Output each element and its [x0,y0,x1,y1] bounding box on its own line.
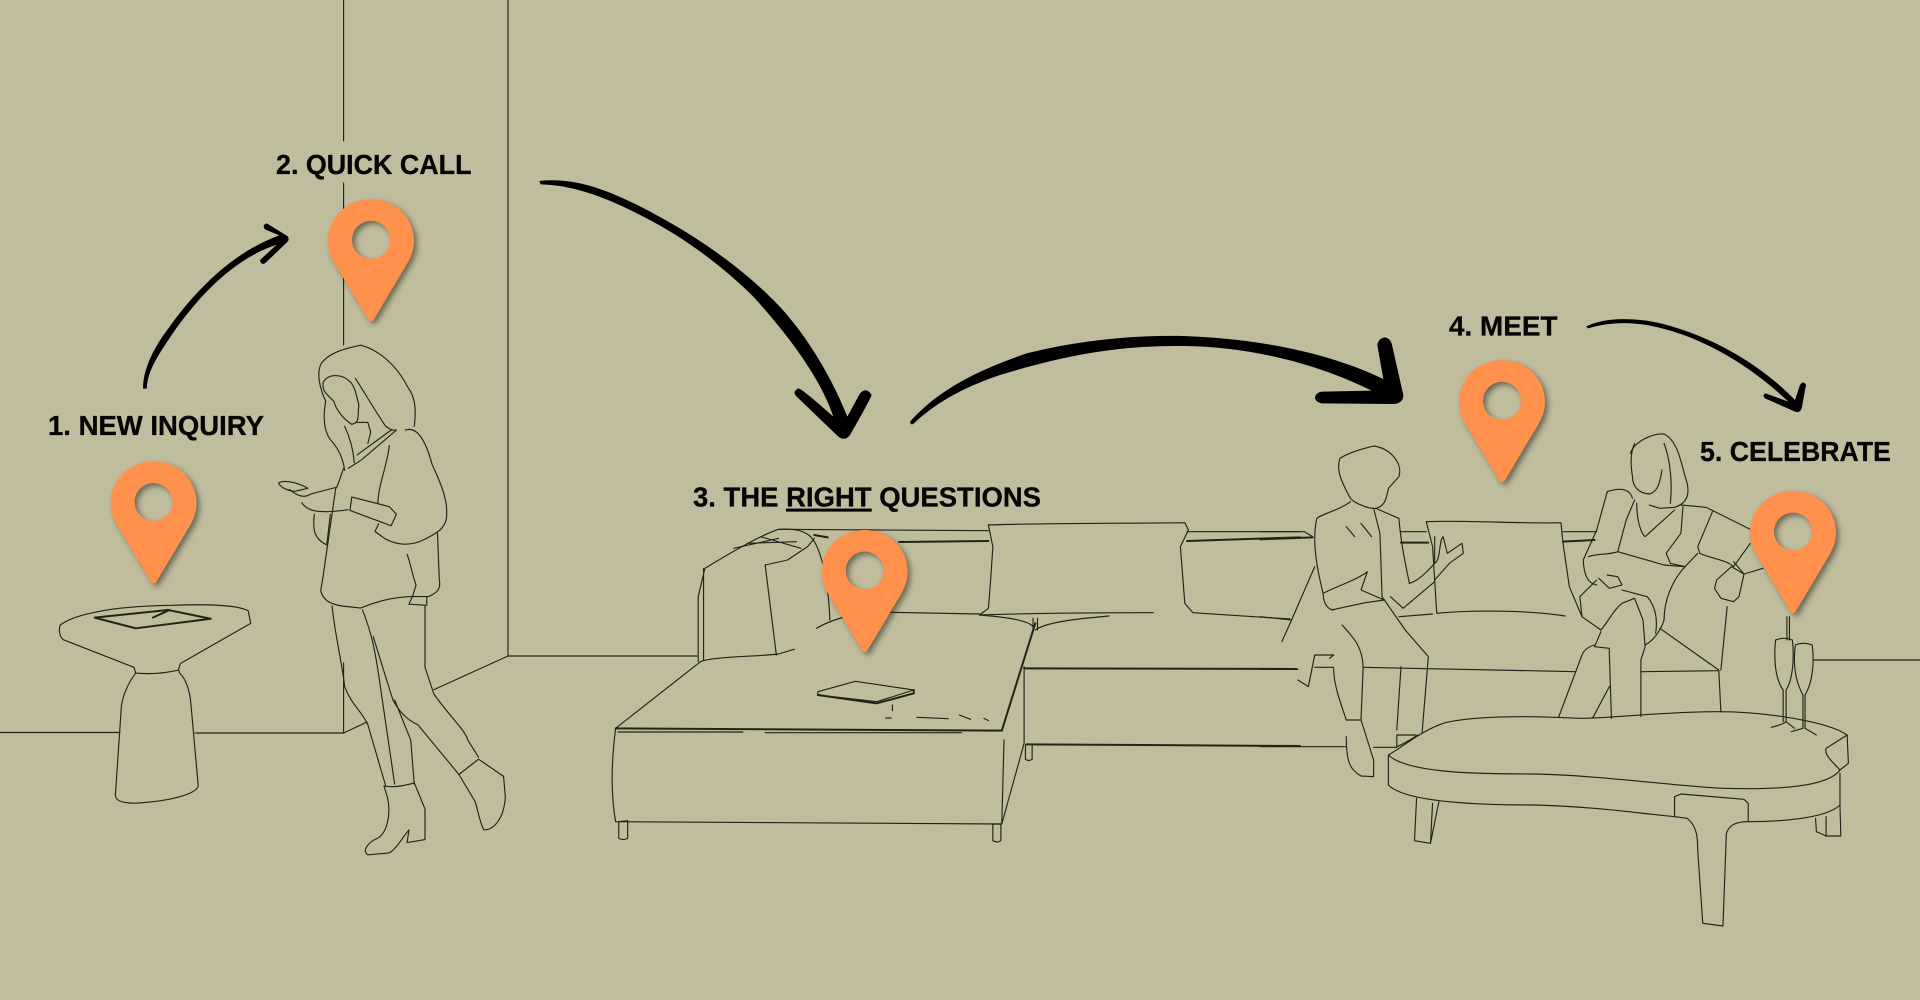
pin 3 [822,530,908,652]
label: step 1: 1. NEW INQUIRY [48,410,264,441]
label: step 2: 2. QUICK CALL [276,149,472,180]
seated woman [1559,434,1763,718]
arrow: step 4 to step 5 [1586,319,1806,412]
champagne glasses [1771,617,1816,735]
coffee table [1388,712,1848,926]
label: step 3: 3. THE RIGHT QUESTIONS [693,482,1041,513]
label: step 4: 4. MEET [1449,310,1558,342]
room walls and floor lines [0,0,1920,733]
arrow: step 2 to step 3 [539,180,872,439]
pin 2 [328,199,414,321]
label: step 5: 5. CELEBRATE [1700,436,1891,467]
sofa right section [1260,521,1727,747]
arrow: step 3 to step 4 [910,336,1403,424]
side table with tablet [59,605,251,803]
arrow: step 1 to step 2 [143,223,289,389]
pin 1 [111,462,197,584]
sofa chaise section with tablet [612,523,1300,842]
woman looking at phone [279,345,505,855]
pin 5 [1750,491,1836,613]
seated person gesturing [1282,446,1463,777]
pin 4 [1459,360,1545,482]
